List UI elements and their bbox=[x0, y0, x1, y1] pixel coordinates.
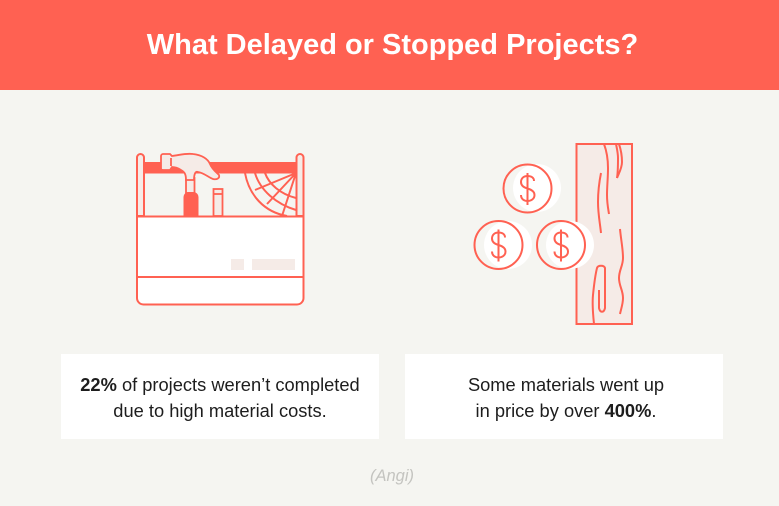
source: (Angi) bbox=[370, 467, 414, 485]
text: 22 percent bbox=[80, 374, 360, 421]
wood grain bbox=[604, 144, 609, 214]
wood plank bbox=[576, 144, 632, 324]
toolbox top bar bbox=[143, 162, 297, 174]
text: 22 percent: due to high material costs. bbox=[113, 400, 327, 421]
icon: toolbox with hammer bbox=[137, 154, 304, 305]
dollar signs bbox=[492, 173, 568, 262]
title: What Delayed or Stopped Projects? bbox=[147, 29, 638, 61]
icon: coins and wood plank bbox=[474, 144, 632, 324]
hammer handle bbox=[186, 178, 194, 193]
text: 400 percent: Some materials went up bbox=[468, 374, 664, 395]
panel: material costs stat bbox=[61, 354, 379, 439]
hammer head bbox=[161, 154, 219, 180]
panel: price increase stat bbox=[405, 354, 723, 439]
header banner bbox=[0, 0, 779, 90]
text: 400 percent: in price by over 400%. bbox=[476, 400, 656, 421]
toolbox divider bbox=[137, 276, 304, 278]
coins bbox=[474, 164, 594, 269]
text: 400 percent bbox=[468, 374, 664, 421]
toolbox label marks bbox=[231, 259, 295, 270]
spider web bbox=[245, 173, 296, 216]
nail or pencil bbox=[214, 189, 222, 216]
text: 22 percent: 22% of projects weren’t completed bbox=[80, 374, 360, 395]
toolbox body bbox=[137, 216, 304, 305]
toolbox posts bbox=[137, 154, 304, 216]
